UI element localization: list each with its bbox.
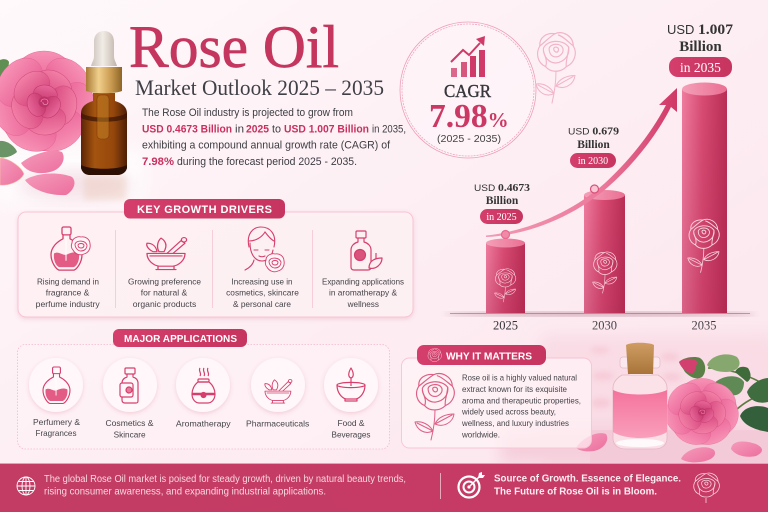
footer slogan: The Future of Rose Oil is in Bloom. [494,485,657,497]
gold collar [86,67,122,93]
faint background petals [591,347,681,408]
icon: target [458,472,485,498]
heading pill [417,345,546,365]
footer slogan: Source of Growth. Essence of Elegance. [494,473,681,485]
title [129,14,384,100]
subtitle: Market Outlook 2025 – 2035 [135,75,384,100]
footer summary text [44,474,406,498]
left hero: rose and dropper bottle [0,31,145,202]
driver captions: in aromatherapy & [329,288,397,298]
icon: growth chart [451,36,485,77]
intro paragraph: 7.98% [142,156,174,168]
cork [626,343,654,374]
bottom right photo: rose water jar and rose [500,335,768,475]
driver captions: & personal care [233,299,291,309]
value label 2030: in 2030 [578,156,608,167]
bar 2030 [584,190,625,313]
icon: perfume bottle with rose [51,227,90,270]
value label 2035 [667,22,734,77]
amber bottle [81,93,127,175]
icon: perfume [43,367,70,404]
icon: globe [17,477,35,495]
application captions: Skincare [114,430,146,440]
value label 2025: USD 0.4673 [474,182,531,194]
title: Rose Oil [129,14,339,80]
body text: aroma and therapeutic properties, [462,396,581,406]
value label 2025: Billion [486,195,519,207]
bar chart [444,22,756,332]
value label 2025 [474,182,531,224]
heading pill [113,329,247,347]
icon: rose outline [415,374,454,440]
body text: extract known for its exquisite [462,384,567,394]
driver captions: Growing preference [128,276,201,286]
application captions: Food & [338,418,365,428]
body text: widely used across beauty, [461,406,556,416]
leaves behind rose [0,59,9,82]
icon: aroma diffuser [192,368,215,403]
panel: major applications [18,329,390,449]
axis labels: 2025 [493,318,518,332]
intro paragraph: during the forecast period 2025 - 2035. [177,156,357,168]
bar 2025 [486,238,525,313]
intro paragraph: exhibiting a compound annual growth rate (CAGR) of [142,140,391,152]
heading pill: KEY GROWTH DRIVERS [137,204,272,216]
body text: Rose oil is a highly valued natural [462,373,577,383]
application captions: Cosmetics & [106,418,154,428]
intro paragraph: The Rose Oil industry is projected to grow from [142,107,353,119]
driver captions: wellness [347,299,379,309]
driver captions: organic products [133,299,196,309]
fallen petals [0,158,24,185]
icon circles [29,358,378,412]
footer summary text: rising consumer awareness, and expanding industrial applications. [44,486,326,498]
intro paragraph: USD 1.007 Billion [284,124,369,136]
intro paragraph: to [272,124,281,136]
value label 2035: Billion [679,39,722,55]
heading pill: WHY IT MATTERS [446,352,532,362]
driver captions: perfume industry [36,299,100,309]
axis labels: 2030 [592,318,617,332]
fallen petals [576,433,607,451]
intro paragraph: USD 0.4673 Billion [142,124,232,136]
driver captions [36,276,404,309]
icon: mortar and leaves [147,238,187,270]
application captions: Pharmaceuticals [246,418,309,428]
decorative rose outline [536,33,575,103]
driver captions: Rising demand in [37,276,99,286]
icon: rose outline [694,473,719,503]
growth arrow [486,88,677,237]
bottle reflection [84,176,126,200]
driver captions: fragrance & [46,288,90,298]
large rose [661,377,743,450]
value label 2035: in 2035 [680,60,721,75]
intro paragraph: in [235,124,244,136]
icon: oil bottle with leaf [351,231,382,270]
panel: why it matters [402,345,592,448]
driver captions: Increasing use in [232,276,293,286]
driver captions: Expanding applications [322,276,404,286]
body text [461,373,581,440]
value label 2030: USD 0.679 [568,126,620,138]
driver captions: for natural & [141,288,188,298]
application captions: Fragrances [36,428,76,438]
heading pill [124,199,285,218]
stem and leaves [708,368,768,410]
application captions: Aromatherapy [176,418,231,428]
value label 2035: USD 1.007 [667,22,734,38]
filled rose [0,49,101,160]
intro paragraph: 2025 [246,124,269,136]
body text: worldwide. [461,430,500,440]
CAGR badge: (2025 - 2035) [437,134,501,145]
footer summary text: The global Rose Oil market is poised for steady growth, driven by natural beauty trends, [44,474,406,485]
application captions: Perfumery & [33,417,80,427]
icon: cosmetics bottle [120,368,138,403]
glass jar [613,343,667,449]
value label 2030 [568,126,620,168]
body text: wellness, and luxury industries [461,418,569,428]
axis labels [493,318,716,332]
intro paragraph [142,107,406,168]
baseline shadow [444,312,756,316]
axis labels: 2035 [692,318,716,332]
dropper bulb [91,31,117,66]
CAGR badge [400,22,536,158]
rose bud [679,357,705,378]
bar 2035 [682,82,727,313]
panel: key growth drivers [18,199,413,317]
icon: face with towel and rose [245,227,284,272]
value label 2030: Billion [577,139,610,151]
intro paragraph: in 2035, [372,124,406,136]
icon: bowl with candle [337,368,365,401]
CAGR badge: CAGR [444,81,491,101]
value label 2025: in 2025 [486,212,517,223]
heading pill: MAJOR APPLICATIONS [124,334,237,345]
footer band [0,463,768,512]
icon: mortar [265,379,292,403]
driver captions: cosmetics, skincare [226,288,299,298]
application captions: Beverages [332,430,370,440]
application captions [33,417,370,440]
footer slogan [494,473,681,497]
CAGR badge: 7.98% [429,98,509,135]
